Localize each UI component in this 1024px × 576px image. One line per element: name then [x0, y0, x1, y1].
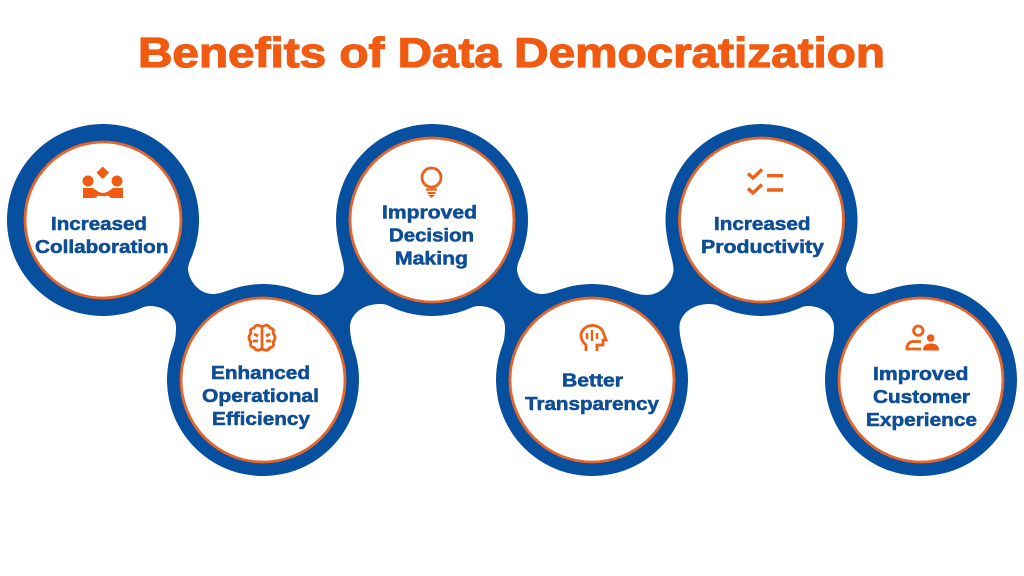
label: increased collaboration: Increased [51, 213, 147, 234]
title: Benefits of Data Democratization [138, 29, 885, 76]
label: improved customer experience: Experience [866, 409, 977, 430]
icon: checklist [748, 170, 783, 193]
label: increased productivity: Productivity [701, 236, 825, 257]
panel: enhanced operational efficiency [181, 298, 345, 462]
label: increased collaboration: Collaboration [35, 236, 168, 257]
panel: improved decision making [350, 138, 514, 302]
icon: brain [249, 325, 275, 350]
icon: head with data bars [581, 325, 606, 351]
connected blue chain background [7, 124, 1017, 476]
label: improved decision making: Making [395, 248, 468, 269]
label: enhanced operational efficiency: Operational [202, 385, 319, 406]
label: improved customer experience: Customer [873, 386, 970, 407]
panel: increased collaboration [25, 142, 181, 298]
label: better transparency [525, 370, 660, 414]
label: better transparency: Transparency [525, 393, 660, 414]
icon: light bulb [422, 168, 441, 198]
label: enhanced operational efficiency [202, 362, 319, 429]
label: improved decision making: Decision [389, 225, 474, 246]
panel: improved customer experience [839, 298, 1003, 462]
panel: increased productivity [680, 138, 844, 302]
label: enhanced operational efficiency: Enhanced [211, 362, 310, 383]
label: increased collaboration [35, 213, 168, 257]
label: better transparency: Better [562, 370, 623, 391]
label: improved decision making: Improved [382, 202, 477, 223]
icon: people [907, 326, 939, 350]
label: increased productivity [701, 213, 825, 257]
icon: collaboration handshake [82, 166, 123, 198]
panel: better transparency [510, 298, 674, 462]
label: improved customer experience: Improved [873, 363, 968, 384]
label: improved decision making [382, 202, 477, 269]
label: increased productivity: Increased [714, 213, 810, 234]
label: enhanced operational efficiency: Efficiency [212, 408, 311, 429]
label: improved customer experience [866, 363, 977, 430]
